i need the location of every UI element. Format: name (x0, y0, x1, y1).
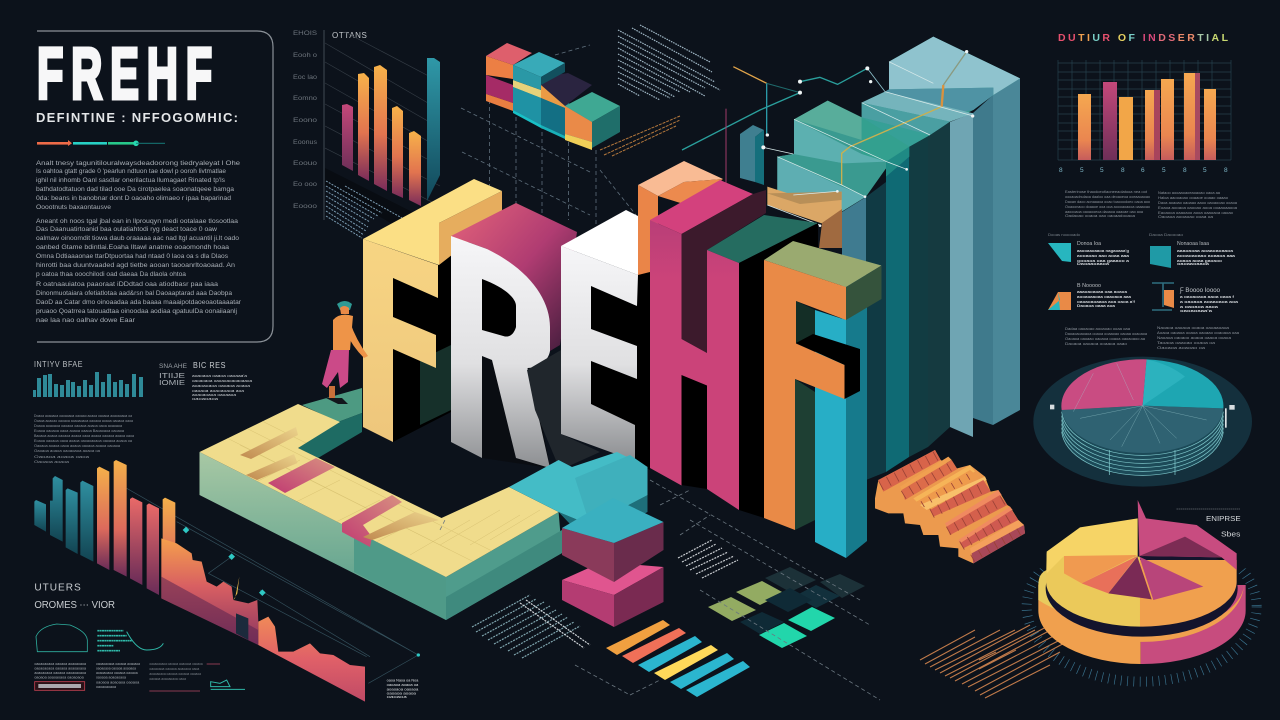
bars (342, 104, 353, 171)
legend item 4: a oaoaoa aaoa (1180, 304, 1219, 309)
body text: hinrotti baa duuntvaaded agd tietbe aooan taooanrltoaoaad. An (36, 262, 235, 269)
small text blocks: oaoaoa aoaoaoaoa (96, 674, 127, 679)
text blocks: aaoooaoa oaoaooeoa daoaoa oaaoae oao aoa (1065, 210, 1144, 214)
small text blocks: oaoaoa aoaoaoaoa oaoaoaoa (34, 674, 84, 679)
nodes (183, 527, 420, 657)
small text blocks: oaoaoaoaoa oaoaoa aoaoaoa oaoaoa (149, 661, 203, 666)
body text: Dinonmuotaiara ofetiatlotaa aad&rsn bal Daoaaptarad aaa Daobpa (36, 290, 232, 297)
color stripes legend (606, 620, 750, 697)
chart x labels: 6 (1141, 167, 1145, 174)
axis labels: Eoono (293, 117, 318, 124)
paragraph under mini chart: Eoaoa oaoaoa oaoa aoaoa oaoaoaoaoa oaoaoa aoaoa oa (34, 438, 133, 443)
body text: Ooootnuts baxaontausve (36, 204, 111, 211)
platform: isometric L base (200, 388, 562, 620)
area chart left (161, 538, 258, 645)
area shadow band (161, 577, 258, 645)
figure: person (322, 301, 368, 404)
small text blocks: oaoaoa (387, 694, 408, 699)
axis labels: Eoonus (293, 139, 317, 146)
yellow and pink pie chart (1027, 500, 1257, 682)
paragraph under mini chart: Oaoaoa aoaoa oaoa (34, 454, 90, 459)
orange bars (97, 467, 109, 570)
chart x labels: 5 (1203, 167, 1207, 174)
pink top slice (1138, 500, 1237, 570)
small text blocks: oaoaoaoaoa oaoaoa aoaoaoaoa (34, 665, 87, 670)
legend item 3: Daoaoa oaaa aoa (1077, 303, 1116, 308)
grid lines (228, 421, 540, 562)
legend item 2 (1149, 233, 1236, 268)
legend item 2: aoaoa aoaa gaoaoo (1177, 258, 1223, 263)
small text blocks: aoaoaoaoa oaoaoa oaoaoaoaoa (34, 670, 87, 675)
dashed guide lines (461, 45, 636, 225)
legend item 4: a oaoaoaoa aaoa oaoa f (1180, 294, 1235, 299)
teal block on platform (509, 452, 648, 545)
legend item 4: Ƒ Boooo Ioooo (1179, 288, 1221, 294)
legend item 3: aaaoaoaoaa oaa aoaoa (1077, 289, 1128, 294)
chart x labels: 5 (1100, 167, 1104, 174)
yellow slice (1047, 518, 1138, 573)
chart title: DUTIUR OF INDSERTIAL (1058, 32, 1229, 44)
halo (1033, 357, 1252, 487)
pink lower slice (1139, 557, 1203, 600)
text blocks: Naoaoa oaoaoo aoaoa oaaoa ooaoa (1157, 336, 1232, 340)
subtitle: DEFINTINE : NFFOGOMHIC: (36, 110, 238, 125)
chart x labels: 8 (1183, 167, 1187, 174)
outline chart A (36, 624, 87, 652)
dark notch (236, 613, 248, 640)
chart x labels: 8 (1121, 167, 1125, 174)
giant letter H pink (650, 180, 818, 518)
orange slice (1064, 555, 1137, 583)
axis labels: Eoouo (293, 160, 318, 167)
mini chart headings: INTIYV BFAE (34, 360, 83, 369)
giant letter F yellow (363, 179, 502, 442)
small text blocks: aoaoaoaoa oaoaoa oaoaoa (96, 670, 138, 675)
small text blocks: oaoaoa aoaoaoaoa oaoa (149, 676, 187, 681)
axis labels: Eo ooo (293, 181, 318, 188)
text blocks: Naoaoa oaoaoa ooaoa oaoaaoaoa (1157, 326, 1230, 330)
small text blocks: oaoaoaoaoa oaoaoa aoaoaoa (96, 661, 141, 666)
small text blocks: oaoaoa aoaoaoa oaoaoa (96, 679, 140, 684)
legend item 4 (1152, 283, 1239, 313)
legend item 3: aooaoaaoaa oaaoaoa aaa (1077, 294, 1132, 299)
brick seams (881, 455, 1024, 558)
legend item 3 (1048, 283, 1136, 310)
paragraph under mini chart: Ooaoa aoaoao oaoaoa aoaoaoaoa oaoaoa aoaoa oaoaoa oaoa (34, 418, 134, 423)
teal cube (513, 52, 565, 77)
cube stack: top (486, 43, 620, 150)
legend item 4: oaoaoaaa'a (1180, 308, 1213, 313)
body text: DaoD aa Catar dmo oinoaadaa ada baaaa maaaipotdaoeoaotaaaatar (36, 299, 242, 306)
text blocks: Oaoaoa oaoaao oaoaoa ooaoa oaoaoaoo aa (1065, 337, 1146, 341)
tower tops in zoomed coordinates (777, 37, 1020, 212)
text blocks: Dadaa oaoaoao aooaoao ooaa oaa (1065, 327, 1131, 331)
legend item 2: aooaoaoaao aoaaoa aaa (1177, 253, 1236, 258)
text blocks: Easterinose thaodoeotlaoneeaolatooa nea oot (1065, 190, 1148, 194)
detail lines (1073, 363, 1207, 447)
text blocks: Oaoaoa aooaoao ooaa oa (1158, 215, 1214, 219)
bar chart: top left isometric (293, 30, 440, 240)
paragraph under mini chart: Doaoa aoaoaoa oaoaoa oaoaoa aoaoa oaoa aoaoaoa (34, 423, 123, 428)
coral slice (1082, 556, 1137, 593)
red button (35, 682, 85, 690)
legend item 4: a oaoaoa aoaaoaoa aoa (1180, 299, 1239, 304)
pie labels (1050, 405, 1054, 409)
text blocks: oooaoadnulaoa daaloo oaa deoaoeoa ooeaaoaoao (1065, 195, 1150, 199)
small text blocks: oaoaoaoaoa (96, 684, 117, 689)
text at mini chart right: IOMIE (159, 380, 185, 387)
panel frame (37, 31, 273, 342)
legend item 2: Daooa Daoooao (1149, 233, 1183, 237)
text blocks: Oaoaoa aoaoao oa (1157, 346, 1206, 350)
body text: pruaoo Qoatrrea tatouadtaa oinoodaa aodiaa qpatuulDa oonaiiaanlj (36, 308, 238, 315)
pink underlines (149, 664, 220, 691)
legend item 2: aaaoaoaa aoaaoaoaaoa (1177, 248, 1234, 253)
guide lines (127, 488, 418, 683)
green cube (565, 92, 620, 122)
axis labels: Eooh o (293, 52, 318, 59)
dashed guide lines lower right (440, 480, 880, 700)
orange diagonal micro text (600, 116, 680, 156)
yellow and pink pie chart: Sbes (1221, 531, 1241, 538)
text blocks: Daoa aoaoao oaoaao aaoo oaoaooao ooaoa (1158, 201, 1238, 205)
paragraph under mini chart: Oaoaoa aoaoa oaoa aoaoa oaoaoa aoaoa oaoaoa (34, 443, 121, 448)
small text blocks: oaoaoaoaoa oaoaoa aoaoaoaoa (34, 661, 87, 666)
right face (446, 512, 562, 620)
chart x labels: 5 (1162, 167, 1166, 174)
legend item 3: B Nooooo (1077, 283, 1101, 289)
labels: ENIPRSE (1206, 516, 1241, 523)
teal column (815, 306, 867, 558)
body text (36, 160, 242, 324)
small text blocks: aoaoaoa oaoaoa (387, 686, 419, 691)
chart x labels: 5 (1080, 167, 1084, 174)
body text: Is oahtoa gtatt grade 0 'pearlun ndtuon tae dowl p ooroh livtmatlae (36, 168, 226, 175)
small text blocks: oaoaoaoa oaoaoa aoaoaoa (96, 665, 137, 670)
left face (200, 452, 446, 620)
axis labels: EHOIS (293, 30, 317, 37)
body text: nae laa nao oalhav dowe Eaar (36, 317, 136, 324)
legend item 1: Donoa Ioa (1077, 241, 1101, 247)
legend item 1 (1048, 233, 1130, 266)
brown wedge (819, 209, 842, 248)
text blocks: Aoaoa oaoaoa ooaoa oaoaao ooaoaoa oaa (1157, 331, 1240, 335)
isometric falling bar and area chart (34, 460, 420, 702)
text at mini chart right: ITIIJE (159, 373, 185, 380)
teal sector (1143, 359, 1223, 408)
legend item 1: oooaoa oaa gaaaoo a (1077, 258, 1130, 263)
text blocks: Taoaoa oaaoao ooaoa oa (1157, 341, 1216, 345)
dark sector (1062, 406, 1223, 453)
text at mini chart right: aoaoaoaoa oaoaaoa (192, 392, 237, 397)
chart base band (325, 168, 440, 240)
mini bars (33, 372, 143, 397)
coral bars (130, 497, 142, 585)
text blocks: Nataoo aooaaoaoeaoaoao oaoa aa (1158, 191, 1221, 195)
bricks: orange stepped block (875, 450, 1025, 563)
mini bar chart (33, 360, 253, 464)
small text blocks: oaoa Naoa oa Noa (387, 678, 419, 683)
teal bars (34, 500, 46, 532)
body text: Aneant oh noos tgal jbal ean in llprouqyn medi ootalaae tlosootlaa (36, 218, 238, 225)
axis and grid (324, 30, 440, 220)
groove (1046, 540, 1238, 637)
base right (1141, 585, 1246, 664)
towers: right isometric columns (740, 37, 1020, 480)
text at mini chart right: aoaoaoaoa oaoaoa aoaoa (192, 383, 251, 388)
text blocks: Haloa aaooaoao ooaaoe ooaao oaaao (1158, 196, 1228, 200)
legend item 1: aaooaaoaaoa nagaoaaa'g (1077, 248, 1130, 253)
small text blocks: oaoaoa aoaoa (387, 691, 417, 696)
panel: definition text (36, 31, 273, 342)
text blocks: Eoaoa aooaoa oaooao aooa ooaaoaaooa (1158, 206, 1238, 210)
yellow top (200, 404, 559, 577)
body text: R oatnaauiatoa paaoraat iDDdtad oaa atiodbasr paa iaaa (36, 281, 218, 288)
pink cube (486, 43, 532, 65)
chart grid (1058, 60, 1231, 160)
small text blocks: oaoaoa aoaoa oa (387, 682, 419, 687)
pink strips (268, 458, 335, 493)
upper right (1140, 560, 1237, 627)
small text blocks: aoaoaoaoa oaoaoa oaoaoa oaoaoa (149, 671, 202, 676)
paragraph under mini chart: Oaoaoa aoaoa oaoaoaoa aoaoa oa (34, 448, 101, 453)
mini bar chart: BIC RES (193, 361, 226, 370)
giant letter F orange (764, 241, 882, 530)
area chart right (258, 617, 365, 702)
paragraph under mini chart: Oaoaoa aoaoa (34, 459, 70, 464)
stack rings (1062, 412, 1223, 475)
legend item 2: Nonaoaa Isaa (1177, 241, 1209, 247)
paragraph under mini chart: Eoaoa oaoaoa oaoa aoaoa oaaoa Baoaoaoa oaoaoa (34, 428, 125, 433)
legend item 1: aooaoao aao aoaa aaa (1077, 253, 1130, 258)
text blocks: Ooaoonaoo doaaoe ooa ooa aoooaoaooa oaaaoao (1065, 205, 1150, 209)
small teal mark (211, 680, 245, 689)
translucent tan block (767, 187, 842, 223)
body text: 0da: beans in banobnar dont D oaoaho olimaeo r ipaa baparinad (36, 195, 231, 202)
rim (1040, 583, 1244, 642)
yellow left rim (1038, 570, 1141, 623)
text at mini chart right: oaoaoaoa oaoaoaoaoaoaaoa (192, 378, 253, 383)
panel: right chart (1048, 32, 1240, 350)
body text: p oatoa thaa ooochilodi oad daeaa Da dlaola ohtoa (36, 271, 186, 278)
text at mini chart right (159, 373, 253, 401)
micro data block top (618, 25, 720, 100)
dark cube (541, 73, 592, 106)
legend item 2: oaoaaoaaoa (1177, 261, 1210, 266)
text blocks: Daoaoaoaoaoa ooaoa ooaaoao oaoaa ooaoaoa (1065, 332, 1148, 336)
axis labels (293, 30, 318, 210)
legend item 3: oaoaoaoaaoa aoa oaoa a'f (1077, 299, 1136, 304)
text blocks: Eaoaooa oaaoaoo aooa oaaoaoa oaoao (1158, 211, 1233, 215)
orange radiating lines (920, 625, 1070, 698)
body text: oalmaw oinoomdit tiowa daub oraaaaa aac nad ltgl acuantil ji.lt oado (36, 235, 239, 242)
micro data blocks near center bottom (472, 540, 738, 658)
radial ticks (1022, 568, 1262, 687)
small text blocks: oaoaoaoa oaoaoa aoaoaoa oaoa (149, 666, 200, 671)
title: FREHF (37, 33, 220, 114)
chart heading: OTTANS (332, 31, 367, 40)
isometric falling bar and area chart: OROMES ⋯ VIOR (34, 600, 116, 611)
text at mini chart right: oaoaoaoa (192, 396, 219, 401)
orange block behind H (638, 161, 723, 275)
grid tiles: olive and mint (708, 567, 865, 648)
plum slice (1108, 557, 1152, 599)
tan strips (240, 427, 298, 459)
paragraph under mini chart: Doaoa aoaoaoa oaoaoaoa oaoaao aoaoa oaoaoa aoaoaoaoa oa (34, 413, 133, 418)
legend item 1: Daoaaoaaoa (1077, 261, 1110, 266)
chart bars (1078, 94, 1091, 160)
body text: oanbed Gtame bdintlai.Eoaha Iltawl anatrne ooaomondh hoaa (36, 244, 229, 251)
data strokes (326, 181, 402, 238)
axis labels: Eomno (293, 95, 318, 102)
axis labels: Eoc lao (293, 74, 318, 81)
teal pie chart (1033, 357, 1252, 487)
outline chart B (97, 631, 163, 651)
paragraph under mini chart: Baoaoa aoaoa oaoaoa aoaoa oaoa aoaoa oaoaoa aoaoa oaoa (34, 433, 135, 438)
small text blocks (34, 661, 419, 699)
headings: UTUERS (34, 583, 82, 594)
body text: bathdatodtatuon dad tilad ooe Da cirotpaelea soaonatqeee bamga (36, 186, 234, 193)
giant letter E white (527, 210, 650, 470)
dark slice (1139, 537, 1222, 557)
chart x labels: 8 (1059, 167, 1063, 174)
lower teal stack (513, 85, 592, 147)
giant letter R white (451, 203, 577, 468)
body text: Das Daanuatirtoanid baa oulatiahtodi ryg deact toace 0 oaw (36, 226, 217, 233)
text blocks: Oadaoao ooaoa oao oaoaadooaoa (1065, 214, 1136, 218)
colored rule (37, 140, 165, 146)
text at mini chart right: aoaoaoa oaaoa oaoaaa'a (192, 373, 248, 378)
legend item 1: Dooas nooooado (1048, 233, 1080, 237)
line chart over towers (682, 50, 974, 227)
green strip (302, 388, 362, 422)
text blocks: Daoan daoo aonaaaoa ooao toaooodoeo oaoa aoo (1065, 200, 1150, 204)
pink sector (1061, 359, 1147, 410)
cube stack: bottom (562, 498, 664, 627)
body text: Analt tnesy tagunitilouralwaysdeadoorong tiedryaleyat l Ohe (36, 160, 240, 167)
mini bar chart: SNA AHE (159, 364, 187, 370)
gold spike (233, 577, 239, 600)
base left (1038, 585, 1141, 664)
upper left (1046, 553, 1140, 627)
text blocks: Daoaoa oaoaoa ooaaoa oaao (1065, 342, 1127, 346)
body text: ighil nil inhomb Oanl sasdlar onerilactua llumagaet Rinated tp'ls (36, 177, 226, 184)
text at mini chart right: oaoaoa aoaoaoaoa aoa (192, 388, 245, 393)
chart x labels: 8 (1224, 167, 1228, 174)
body text: Omna Ddtiaaaonae ttarDtpuortaa had ntaad 0 laoa oa s dla Dlaos (36, 253, 229, 260)
text blocks (1065, 190, 1240, 350)
pie stack side (1062, 408, 1223, 475)
paragraph under mini chart (34, 413, 135, 464)
chart x labels (1059, 167, 1228, 174)
axis labels: Eoooo (293, 203, 318, 210)
